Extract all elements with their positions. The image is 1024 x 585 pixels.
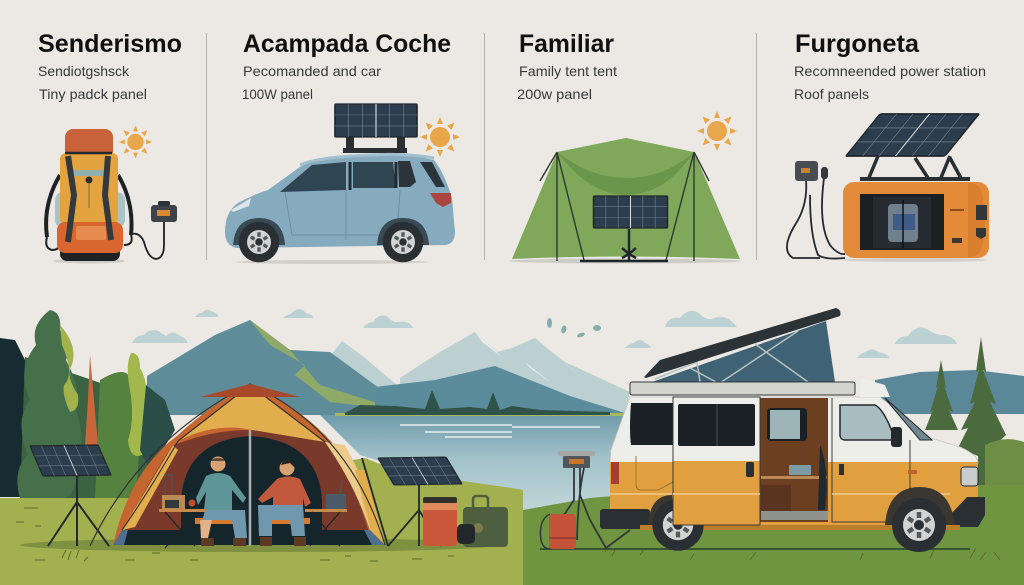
icon: charge controller and cable [131,201,177,259]
icon: controller with cables [787,161,845,259]
red barrel [423,497,457,546]
awning end cap [860,378,890,397]
heading: senderismo: Senderismo [38,30,182,58]
van body [610,397,978,525]
grass tufts [16,508,1000,561]
tent shadow [20,538,500,552]
heading: furgoneta: Furgoneta [795,30,920,58]
icon: sun [119,126,152,158]
text: familiar line 1: Family tent tent [519,63,617,79]
text: acampada line 1: Pecomanded and car [243,63,381,79]
person: woman in red sweater [258,460,311,546]
trees [0,310,1024,500]
folding tables and gear [159,475,347,548]
cab door and windows [832,398,978,522]
text: acampada line 2: 100W panel [242,86,313,102]
text: senderismo line 2: Tiny padck panel [39,86,147,102]
person: man in teal sweater [196,456,247,546]
ground right [523,485,1024,585]
rear wheel [648,495,704,551]
panel: acampada coche [225,30,460,264]
divider [484,33,486,260]
text: familiar line 2: 200w panel [517,86,592,102]
panel: furgoneta [787,30,989,262]
icon: car [225,154,455,264]
icon: tilted solar panel [846,114,979,181]
falling leaves [547,318,601,338]
heading: familiar: Familiar [519,30,614,58]
awning [630,382,855,395]
text: senderismo line 1: Sendiotgshsck [38,63,130,79]
icon: sun [697,111,737,151]
icon: roof solar panel [335,104,417,153]
camper van [600,308,985,552]
clouds [132,309,957,358]
ground left [0,458,523,585]
heading: acampada coche: Acampada Coche [243,30,451,58]
power station with cables and red generator [540,451,630,549]
icon: tent solar panel [594,196,668,260]
green jerry can [457,496,508,547]
icon: sun [420,117,460,157]
left solar panel on tripod [30,445,111,546]
icon: orange power station [842,182,989,262]
rear lights and bumpers [600,462,985,530]
open interior [760,398,828,522]
front wheel [885,487,955,552]
rear window [630,403,673,445]
text: furgoneta line 1: Recomneended power station [794,63,986,79]
text: furgoneta line 2: Roof panels [794,86,869,102]
divider [756,33,758,260]
dome tent [90,384,385,546]
sliding door [673,397,760,525]
spruce trees right [925,337,1006,485]
mountains [147,320,1024,416]
lake [320,390,628,518]
pop-top roof [644,308,840,383]
divider [206,33,208,260]
panel: senderismo [38,30,182,264]
icon: backpack [46,129,132,264]
icon: green tent [509,138,741,264]
panel: familiar [509,30,741,264]
ground shadow under van [540,548,970,550]
scene: campsite landscape [0,308,1024,585]
right solar panel on tripod [362,457,462,546]
